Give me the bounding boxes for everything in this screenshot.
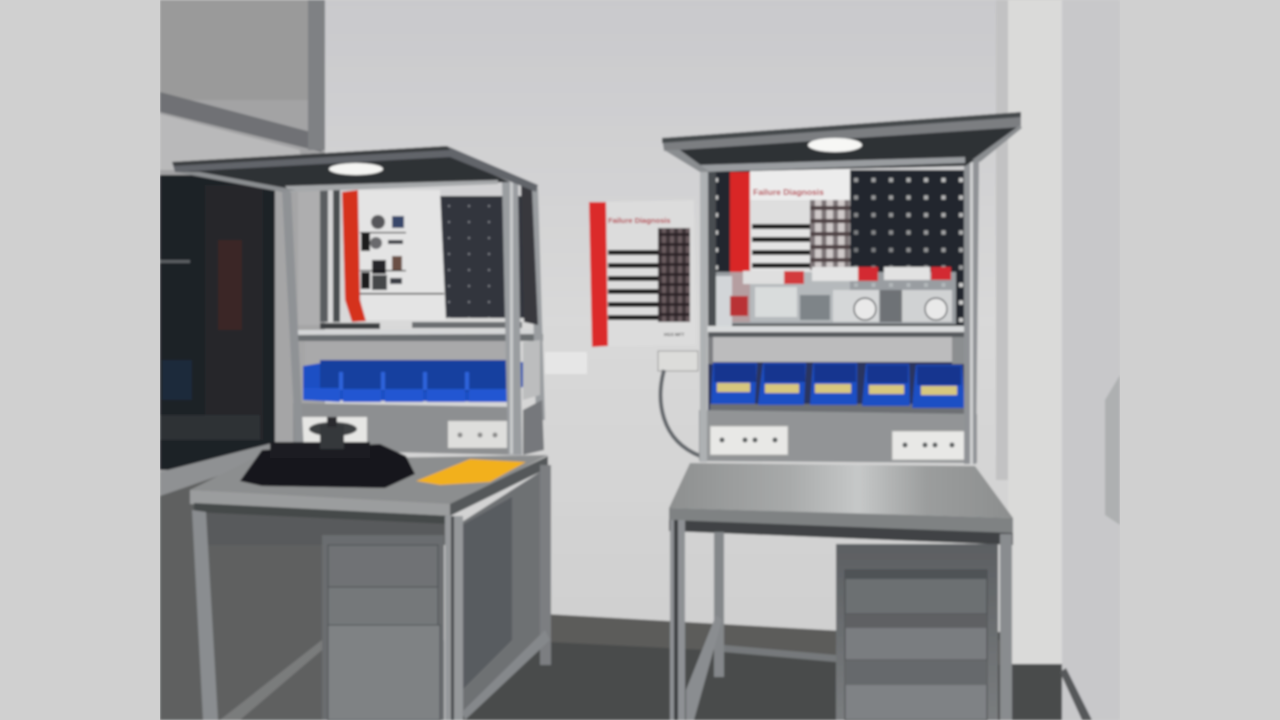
poster red stripe — [589, 202, 608, 347]
poster heading: Failure Diagnosis — [608, 216, 671, 225]
left glass partition — [160, 0, 325, 720]
right wall and door — [996, 0, 1120, 720]
wall poster: Failure Diagnosis — [589, 200, 696, 347]
table legs — [670, 520, 685, 720]
heading: Failure Diagnosis — [753, 187, 824, 197]
poster dark chart — [658, 228, 690, 322]
stripes — [752, 224, 811, 272]
poster on pegboard — [730, 167, 850, 322]
poster stripes — [608, 249, 658, 322]
red band — [342, 190, 366, 322]
table — [190, 455, 551, 720]
back wall — [324, 113, 1000, 638]
floor — [450, 612, 1064, 720]
photo scene: two workstations — [160, 0, 1120, 720]
storage bins — [303, 360, 526, 402]
poster footer: HGS MFT — [664, 332, 684, 337]
storage bins — [708, 362, 968, 414]
lamp — [808, 138, 862, 152]
yellow folder — [416, 459, 526, 485]
wall reflection — [545, 352, 587, 374]
lamp — [329, 163, 383, 175]
socket panel — [699, 410, 977, 463]
drawer cabinet — [322, 535, 444, 720]
shelf — [297, 322, 543, 341]
shadow under table — [206, 510, 446, 545]
product displays — [712, 267, 956, 326]
wall outlet and cable — [658, 351, 700, 456]
black fixture with part — [240, 417, 415, 488]
wall behind bins — [708, 337, 968, 365]
left workstation — [172, 146, 551, 720]
table — [669, 463, 1013, 720]
side panel — [462, 472, 540, 716]
photograph area — [160, 0, 1120, 720]
canopy with lamp — [662, 112, 1022, 172]
wall behind bins — [324, 340, 507, 362]
frame uprights — [282, 182, 545, 455]
chart — [810, 200, 850, 270]
pegboard — [716, 170, 968, 326]
canopy with lamp — [172, 146, 538, 192]
pegboard — [440, 196, 532, 318]
diagram images — [360, 215, 444, 294]
table legs — [192, 510, 218, 720]
right workstation — [662, 112, 1022, 720]
poster on pegboard — [342, 190, 446, 322]
rear frame — [298, 190, 340, 325]
drawer cabinet — [836, 544, 998, 720]
frame uprights — [700, 160, 979, 464]
shelf — [706, 330, 966, 338]
socket panel — [293, 403, 520, 455]
red band — [730, 172, 750, 322]
